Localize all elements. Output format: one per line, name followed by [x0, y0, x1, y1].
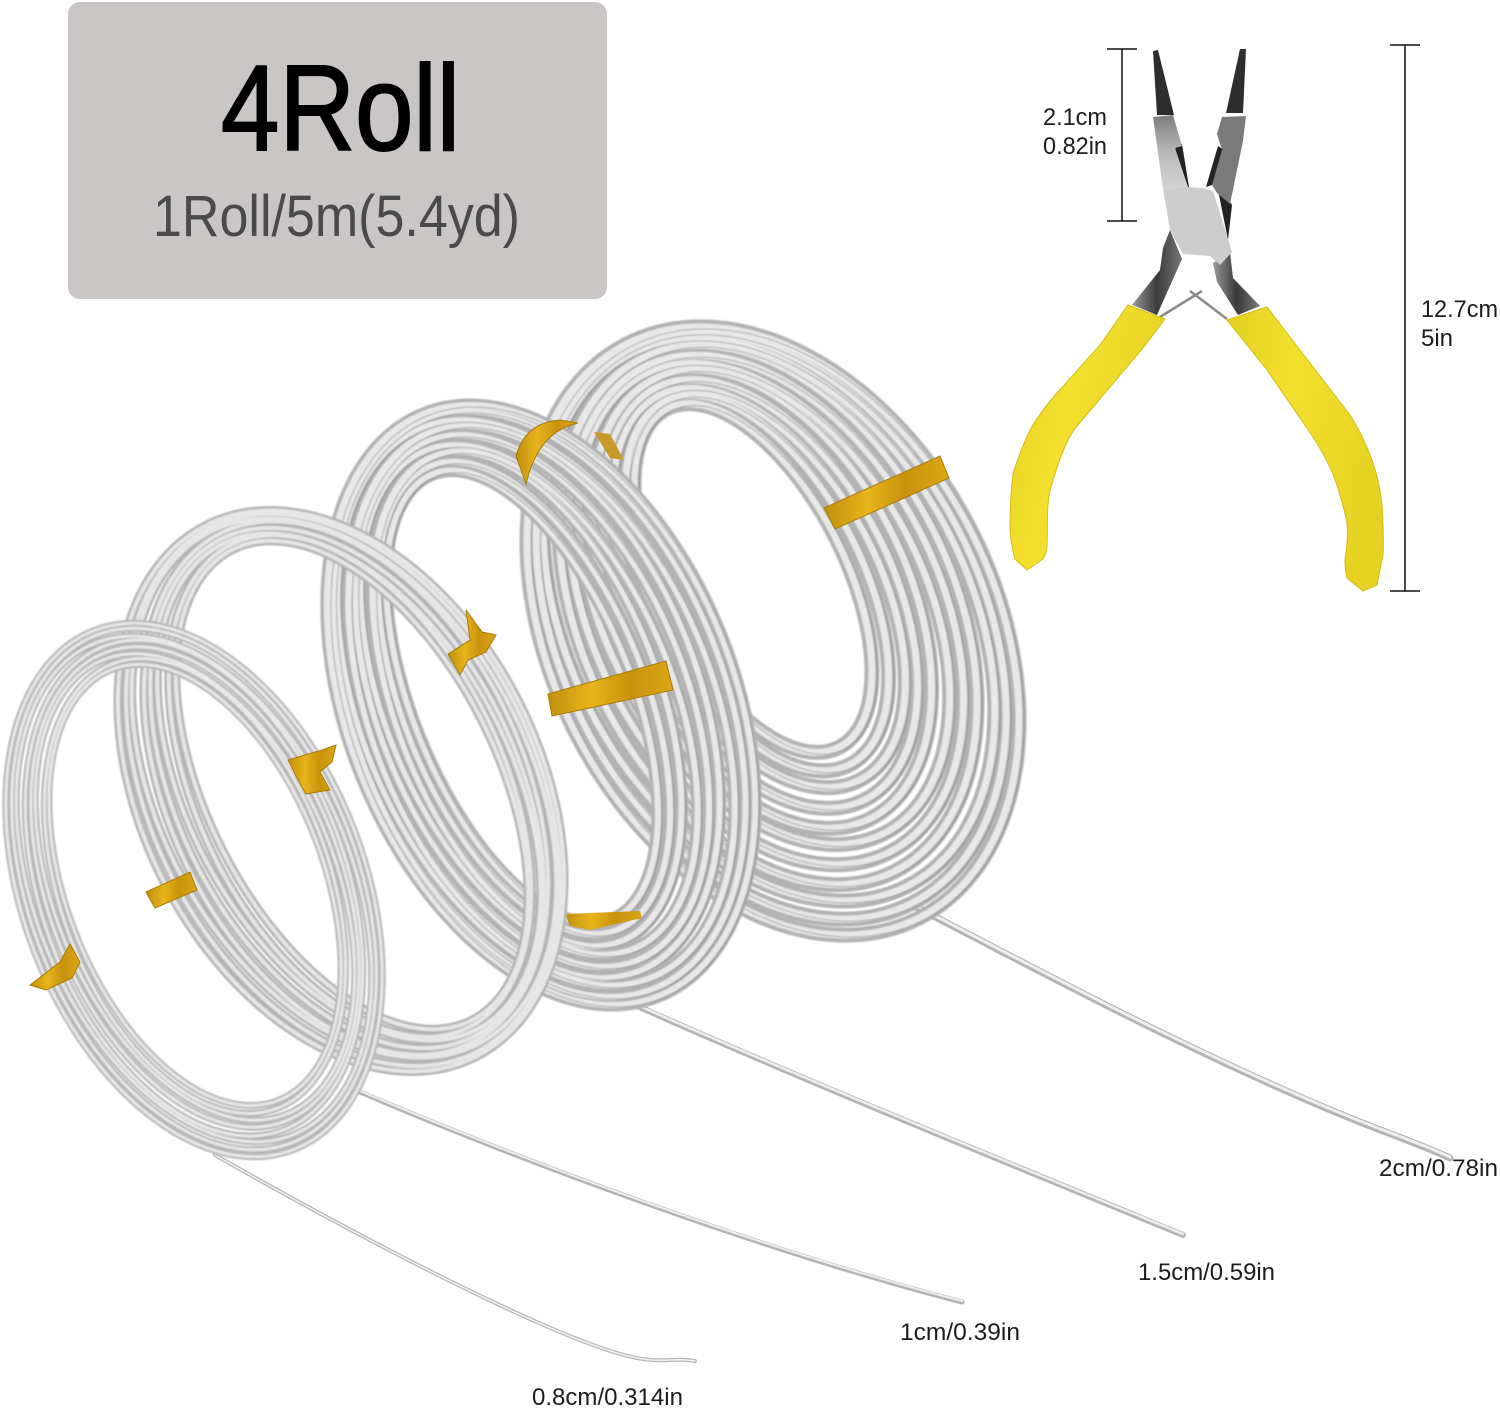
- left jaw: [1153, 115, 1188, 189]
- dimension: jaw length: 2.1cm: [1043, 104, 1107, 131]
- left handle: [1010, 305, 1165, 570]
- gold tie: lower hidden: [565, 911, 642, 930]
- gold tie: top: [516, 420, 578, 484]
- wire tail: 0.8cm: [215, 1155, 695, 1361]
- left tip: [1153, 50, 1174, 115]
- subheading: roll length: 1Roll/5m(5.4yd): [153, 184, 520, 249]
- wire tail: 1cm: [360, 1091, 962, 1302]
- coil: 2cm wire: [429, 243, 1450, 1158]
- coil: 1.5cm wire: [244, 342, 1183, 1235]
- label: 1.5cm wire: 1.5cm/0.59in: [1138, 1259, 1275, 1286]
- dimension: jaw length: [1043, 49, 1137, 221]
- gold tie: coil four inner: [548, 661, 673, 716]
- right tip: [1226, 49, 1246, 113]
- gold tie: lower left: [30, 944, 80, 990]
- left jaw dark inner: [1175, 144, 1189, 187]
- gold tie: top rear: [594, 432, 624, 460]
- gold tie: crumpled: [448, 610, 496, 675]
- panel: roll count: [68, 2, 607, 299]
- wire tail: 1.5cm: [635, 1004, 1183, 1235]
- label: 1cm wire: 1cm/0.39in: [900, 1319, 1020, 1346]
- gold tie: right: [288, 745, 336, 794]
- right jaw: [1212, 116, 1246, 204]
- right handle: [1227, 307, 1383, 591]
- left shank: [1132, 230, 1182, 315]
- coil: 0.8cm wire: [0, 569, 695, 1361]
- icon: round nose pliers: [1010, 49, 1383, 591]
- gold tie: left: [146, 872, 197, 908]
- right jaw dark behind plate: [1206, 146, 1232, 240]
- label: 2cm wire: 2cm/0.78in: [1379, 1155, 1498, 1182]
- pivot plate: [1163, 187, 1232, 265]
- dimension: plier length: 12.7cm: [1421, 296, 1498, 323]
- dimension: plier length: [1390, 45, 1498, 591]
- wire tail: 2cm: [912, 904, 1450, 1158]
- dimension: plier length: 5in: [1421, 325, 1453, 352]
- spring: [1160, 291, 1227, 319]
- label: 0.8cm wire: 0.8cm/0.314in: [532, 1384, 683, 1411]
- dimension: jaw length: 0.82in: [1043, 133, 1107, 160]
- right shank: [1213, 252, 1260, 315]
- coil: 1cm wire: [28, 435, 962, 1302]
- heading: 4Roll: 4Roll: [221, 40, 460, 176]
- gold tie: upper: [824, 456, 949, 529]
